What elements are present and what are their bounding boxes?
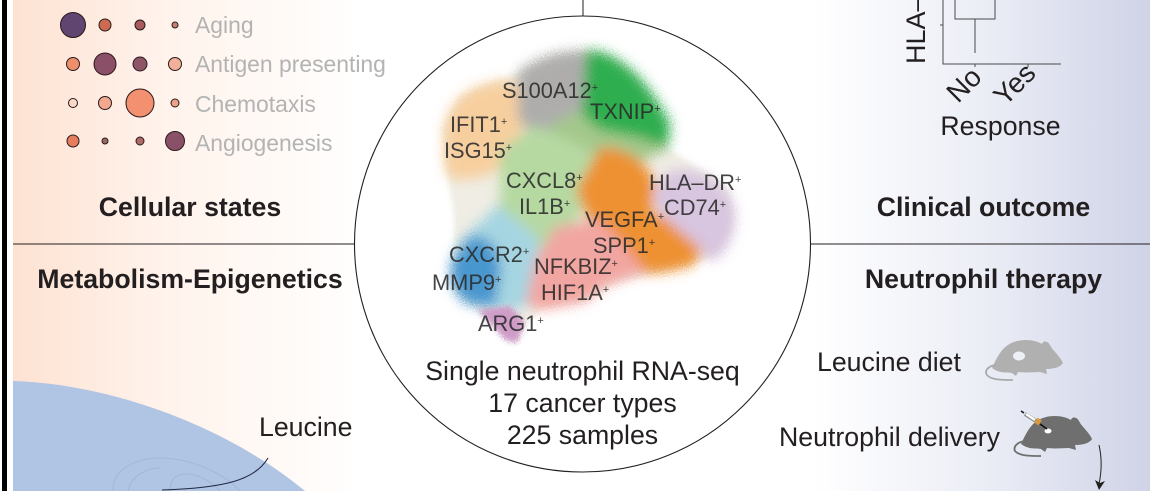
marker labels: HIF1A <box>541 280 603 305</box>
heading: metabolism-epigenetics: Metabolism-Epigenetics <box>37 264 343 294</box>
icon: dark mouse with syringe <box>1014 411 1092 456</box>
marker labels: S100A12 <box>502 78 592 103</box>
heading: neutrophil therapy: Neutrophil therapy <box>865 264 1102 294</box>
marker labels: + <box>501 116 507 128</box>
panel: central circle <box>354 16 810 472</box>
marker labels: IL1B <box>519 194 564 219</box>
marker labels: + <box>576 172 583 184</box>
marker labels: SPP1 <box>593 233 649 258</box>
marker labels: + <box>564 198 570 210</box>
scatter base cloud <box>443 52 732 343</box>
marker labels: IFIT1 <box>450 112 501 137</box>
marker labels: ARG1 <box>478 311 537 336</box>
label: leucine diet: Leucine diet <box>817 347 962 377</box>
arg1 cluster <box>478 306 525 343</box>
label: leucine: Leucine <box>259 412 352 442</box>
marker labels: + <box>649 237 655 249</box>
tick label: No: No <box>940 61 988 108</box>
panel: metabolism-epigenetics <box>37 264 352 490</box>
marker labels: ISG15 <box>444 138 506 163</box>
panel: clinical outcome <box>877 0 1090 222</box>
panel: right background <box>812 0 1150 491</box>
dot plot row labels: Antigen presenting <box>195 51 386 77</box>
marker labels: + <box>735 174 741 186</box>
dot plot row labels: Chemotaxis <box>195 91 316 117</box>
marker labels: VEGFA <box>585 207 658 232</box>
text block: dataset summary: 17 cancer types <box>488 388 677 418</box>
marker labels: + <box>592 82 598 94</box>
heading: cellular states: Cellular states <box>99 192 281 222</box>
marker labels: + <box>603 284 609 296</box>
marker labels: MMP9 <box>432 270 495 295</box>
heading: clinical outcome: Clinical outcome <box>877 192 1090 222</box>
marker labels: CD74 <box>664 195 720 220</box>
marker labels <box>432 78 741 336</box>
arrow: leucine uptake <box>162 458 268 490</box>
arrow: therapy outcome <box>1095 445 1105 490</box>
marker labels: + <box>523 246 529 258</box>
marker labels: + <box>720 199 726 211</box>
panel: neutrophil therapy <box>779 264 1105 490</box>
panel: cellular states <box>60 12 386 222</box>
box plot <box>901 0 1061 141</box>
frame: left black border <box>2 0 7 491</box>
marker labels: + <box>654 103 661 115</box>
marker labels: CXCL8 <box>506 168 576 193</box>
dot plot row labels: Angiogenesis <box>195 130 332 156</box>
axis label: response: Response <box>940 111 1061 141</box>
text block: dataset summary: Single neutrophil RNA-seq <box>425 356 740 386</box>
tick label: Yes: Yes <box>987 57 1042 111</box>
marker labels: + <box>506 142 512 154</box>
label: neutrophil delivery: Neutrophil delivery <box>779 422 1001 452</box>
marker labels: + <box>612 258 618 270</box>
panel: left background <box>13 0 353 491</box>
dot plot <box>60 12 184 150</box>
icon: grey mouse <box>986 340 1063 380</box>
marker labels: + <box>495 274 501 286</box>
marker labels: + <box>537 315 544 327</box>
text block: dataset summary <box>425 356 740 450</box>
dot plot row labels: Aging <box>195 12 254 38</box>
marker labels: NFKBIZ <box>534 254 612 279</box>
divider: horizontal section lines <box>13 0 1150 244</box>
text block: dataset summary: 225 samples <box>507 420 658 450</box>
marker labels: HLA–DR <box>649 170 735 195</box>
chart: neutrophil UMAP <box>432 50 741 343</box>
dot plot row labels <box>195 12 386 156</box>
marker labels: TXNIP <box>590 99 654 124</box>
marker labels: CXCR2 <box>449 242 523 267</box>
marker labels: + <box>658 211 664 223</box>
scatter clusters <box>444 50 735 312</box>
cell: blue cell outline <box>13 381 305 491</box>
